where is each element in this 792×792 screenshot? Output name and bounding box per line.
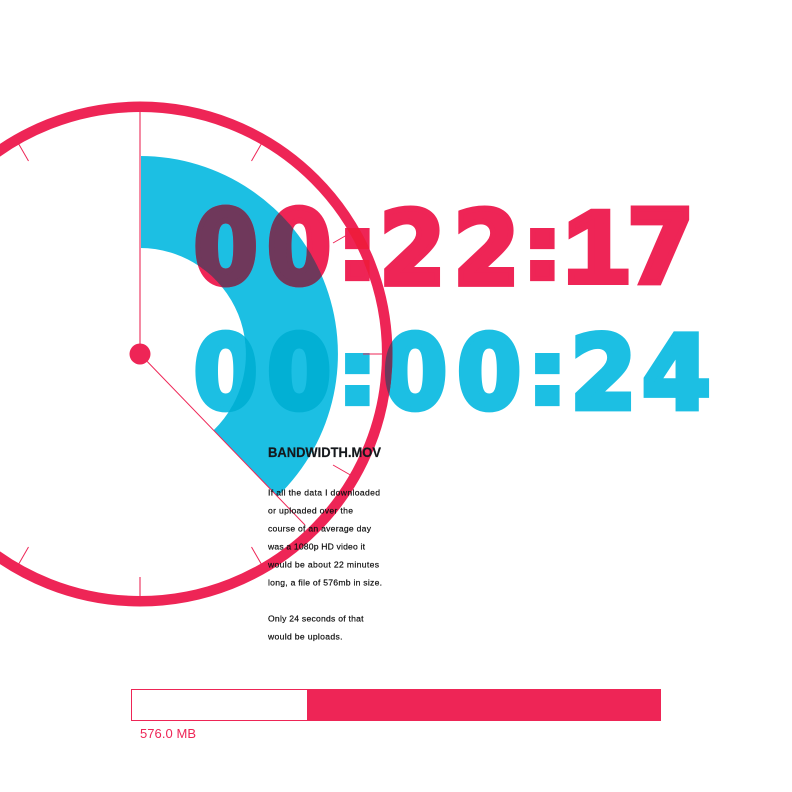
upload duration timer bbox=[194, 314, 711, 433]
overlap of digits and wedge bbox=[195, 204, 330, 412]
overlap of digits and wedge: 0 bbox=[267, 314, 331, 432]
total duration timer: 7 bbox=[627, 189, 694, 307]
heading: BANDWIDTH.MOV bbox=[268, 445, 381, 460]
body text: was a 1080p HD video it bbox=[267, 542, 366, 552]
total duration timer: : bbox=[336, 196, 379, 301]
total duration timer bbox=[194, 189, 694, 309]
body text: would be uploads. bbox=[267, 632, 342, 642]
clock hand: elapsed bbox=[140, 354, 305, 525]
upload duration timer: 0 bbox=[194, 314, 258, 432]
clock hand: 12 o'clock bbox=[139, 110, 141, 354]
upload duration timer: : bbox=[526, 321, 569, 426]
body text bbox=[267, 488, 382, 642]
body text: Only 24 seconds of that bbox=[268, 614, 364, 624]
file size progress bar bbox=[132, 689, 661, 721]
total duration timer: 2 bbox=[379, 191, 446, 309]
total duration timer: 1 bbox=[564, 190, 628, 304]
body text: long, a file of 576mb in size. bbox=[268, 578, 382, 588]
total duration timer: 0 bbox=[267, 189, 331, 307]
clock centre dot bbox=[130, 344, 150, 364]
body text: If all the data I downloaded bbox=[268, 488, 380, 498]
upload duration timer: 0 bbox=[457, 314, 521, 432]
clock ticks bbox=[17, 141, 386, 600]
total duration timer: 2 bbox=[453, 191, 520, 309]
clock ring bbox=[0, 107, 387, 601]
blue wedge: elapsed time bbox=[140, 156, 338, 496]
overlap of ring and digits: : bbox=[336, 196, 379, 301]
upload duration timer: 0 bbox=[267, 314, 331, 432]
overlap of digits and wedge: 0 bbox=[194, 189, 258, 307]
total duration timer: : bbox=[520, 196, 564, 301]
body text: would be about 22 minutes bbox=[267, 560, 379, 570]
upload duration timer: 0 bbox=[383, 314, 447, 432]
overlap of digits and wedge: 0 bbox=[194, 314, 258, 432]
upload duration timer: 4 bbox=[642, 314, 711, 433]
body text: course of an average day bbox=[268, 524, 372, 534]
overlap of ring and digits bbox=[346, 228, 392, 395]
overlap of ring and digits: 0 bbox=[383, 314, 447, 432]
body text: or uploaded over the bbox=[268, 506, 353, 516]
file size label: 576.0 MB bbox=[140, 726, 196, 741]
total duration timer: 0 bbox=[194, 189, 258, 307]
upload duration timer: : bbox=[336, 321, 379, 426]
overlap of digits and wedge: 0 bbox=[267, 189, 331, 307]
upload duration timer: 2 bbox=[570, 315, 637, 433]
